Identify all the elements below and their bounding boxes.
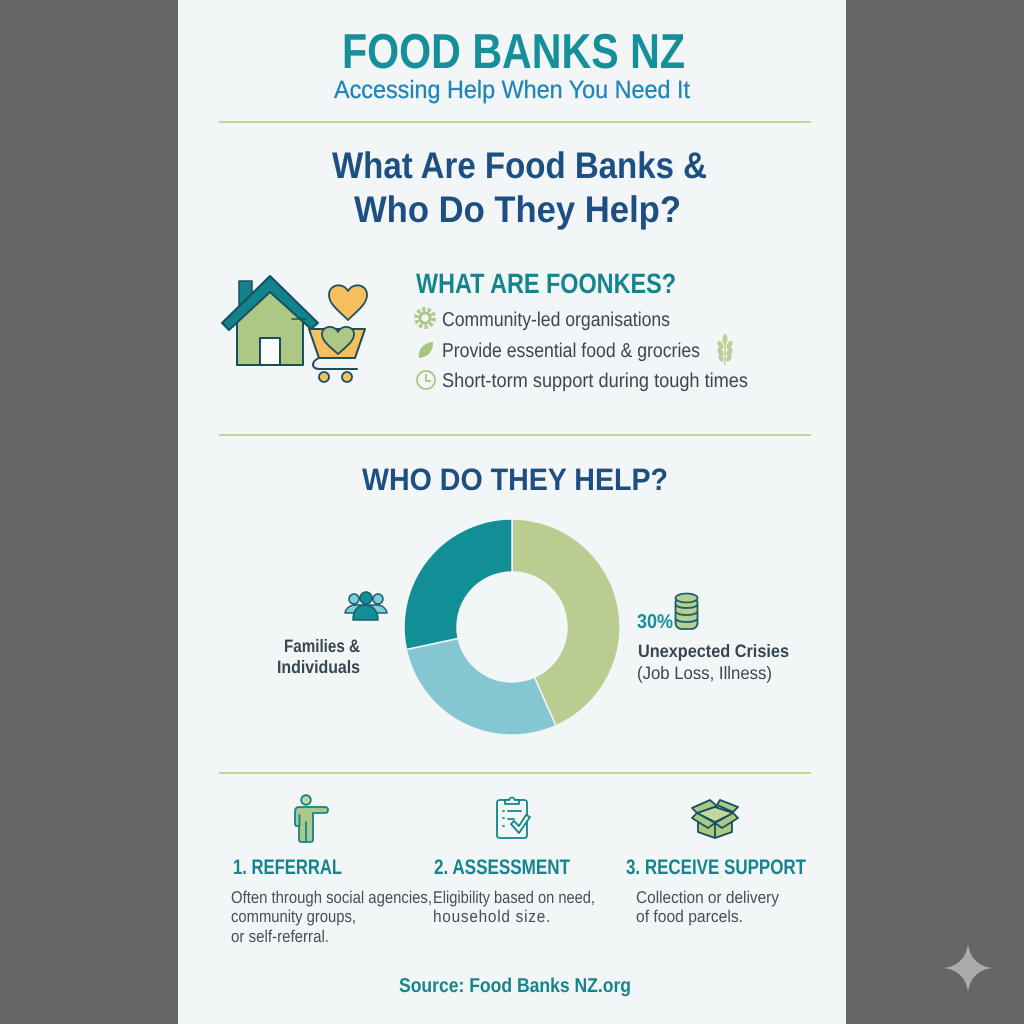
- step text: household size.: [433, 907, 551, 926]
- step text: [433, 888, 595, 926]
- step text: of food parcels.: [636, 907, 743, 926]
- label: unexpected crises: Unexpected Crisies: [638, 641, 789, 661]
- icon: gear: [416, 310, 434, 326]
- donut chart: [404, 519, 620, 735]
- heading: what are food banks: [332, 145, 707, 230]
- step title: 2. ASSESSMENT: [434, 856, 570, 879]
- step text: Collection or delivery: [636, 888, 779, 907]
- step text: Often through social agencies,: [231, 888, 432, 907]
- icon: wheat: [716, 334, 734, 365]
- heading: what are food banks: Who Do They Help?: [354, 189, 681, 230]
- label: families and individuals: [277, 636, 360, 677]
- label: unexpected crises: (Job Loss, Illness): [637, 663, 772, 683]
- step 3: receive support: [626, 800, 806, 926]
- label: unexpected crises: [637, 641, 789, 683]
- step title: 1. REFERRAL: [233, 856, 342, 879]
- step text: [636, 888, 779, 926]
- title: FOOD BANKS NZ: [342, 25, 685, 79]
- icon: leaf: [419, 342, 433, 358]
- step text: [231, 888, 432, 946]
- source: Source: Food Banks NZ.org: [399, 975, 631, 997]
- text: community-led: Community-led organisations: [442, 309, 670, 331]
- step text: community groups,: [231, 907, 356, 926]
- icon: open box: [692, 800, 738, 838]
- label: families and individuals: Individuals: [277, 657, 360, 677]
- heading: what are foonkes: WHAT ARE FOONKES?: [416, 268, 676, 299]
- heading: what are food banks: What Are Food Banks &: [332, 145, 707, 186]
- step title: 3. RECEIVE SUPPORT: [626, 856, 806, 879]
- icon: person pointing: [295, 795, 328, 842]
- icon: clock: [417, 371, 435, 389]
- panel: poster background: [178, 0, 846, 1024]
- heading: who do they help: WHO DO THEY HELP?: [362, 462, 668, 497]
- text: short-term support: Short-torm support during tough times: [442, 370, 748, 392]
- icon: sparkle watermark: [944, 944, 992, 992]
- step text: Eligibility based on need,: [433, 888, 595, 907]
- step 1: referral: [231, 795, 432, 946]
- icon: clipboard with check: [497, 798, 530, 838]
- label: families and individuals: Families &: [284, 636, 360, 656]
- icon: coin stack: [676, 594, 698, 629]
- label: 30 percent: 30%: [637, 611, 673, 633]
- step 2: assessment: [433, 798, 595, 926]
- icon: family group: [345, 592, 387, 620]
- text: essential food: Provide essential food & grocries: [442, 340, 700, 362]
- step text: or self-referral.: [231, 927, 329, 946]
- icon: house and shopping cart with hearts: [222, 276, 367, 382]
- subtitle: Accessing Help When You Need It: [334, 76, 690, 104]
